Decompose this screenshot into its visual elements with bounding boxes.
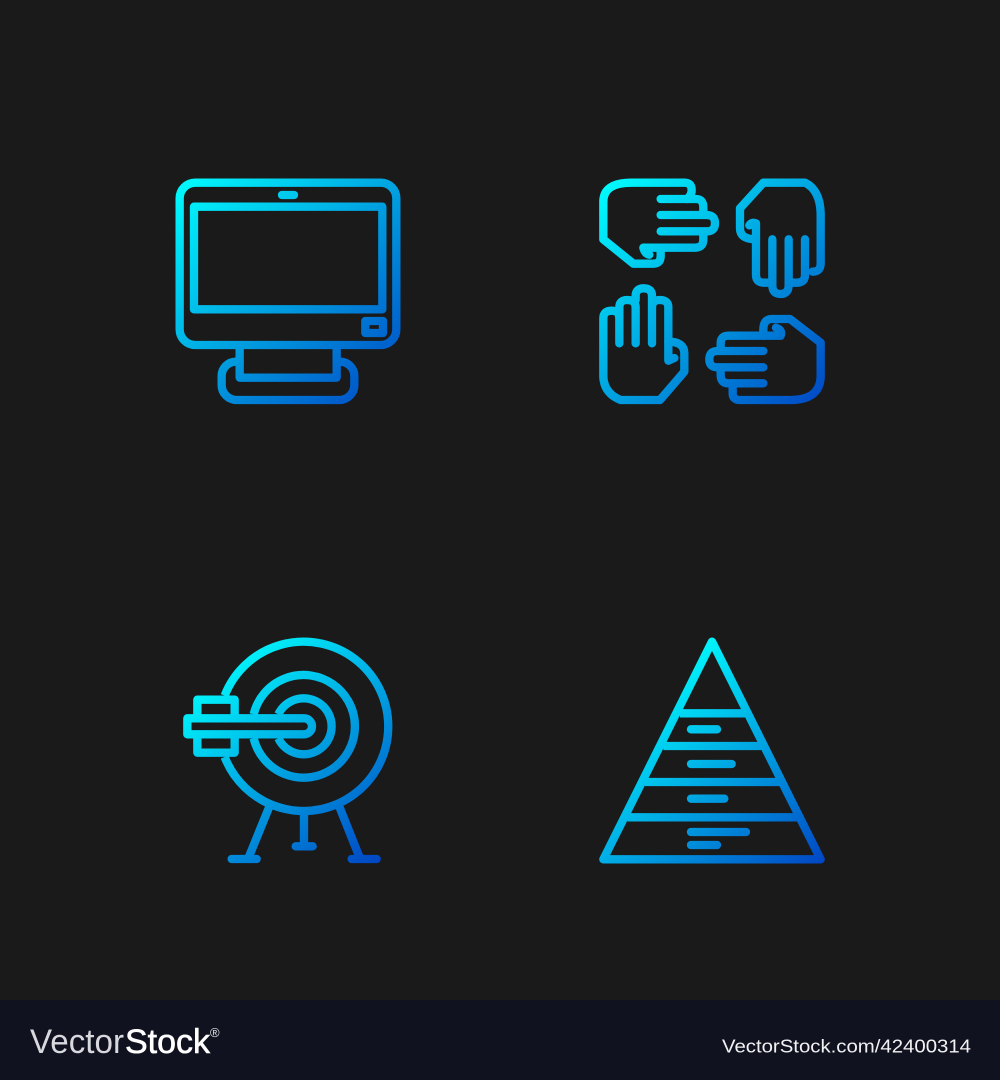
footer bar: ® <box>210 1025 220 1040</box>
target rings <box>225 642 388 811</box>
hand pointing left <box>709 319 821 400</box>
footer bar <box>0 1000 1000 1080</box>
hand pointing down <box>740 183 821 294</box>
image id: VectorStock.com/42400314 <box>722 1036 971 1056</box>
hand pointing up <box>603 288 684 400</box>
arrow <box>187 700 312 753</box>
VectorStock logo: Vector <box>30 1023 124 1061</box>
hand pointing right <box>603 183 715 264</box>
icon: computer monitor <box>180 183 396 400</box>
target stand <box>232 807 377 859</box>
icon: four hands <box>603 183 821 400</box>
footer bar: Stock <box>125 1023 211 1061</box>
icon: layered pyramid <box>603 642 821 859</box>
icon: archery target with arrow <box>187 642 388 859</box>
